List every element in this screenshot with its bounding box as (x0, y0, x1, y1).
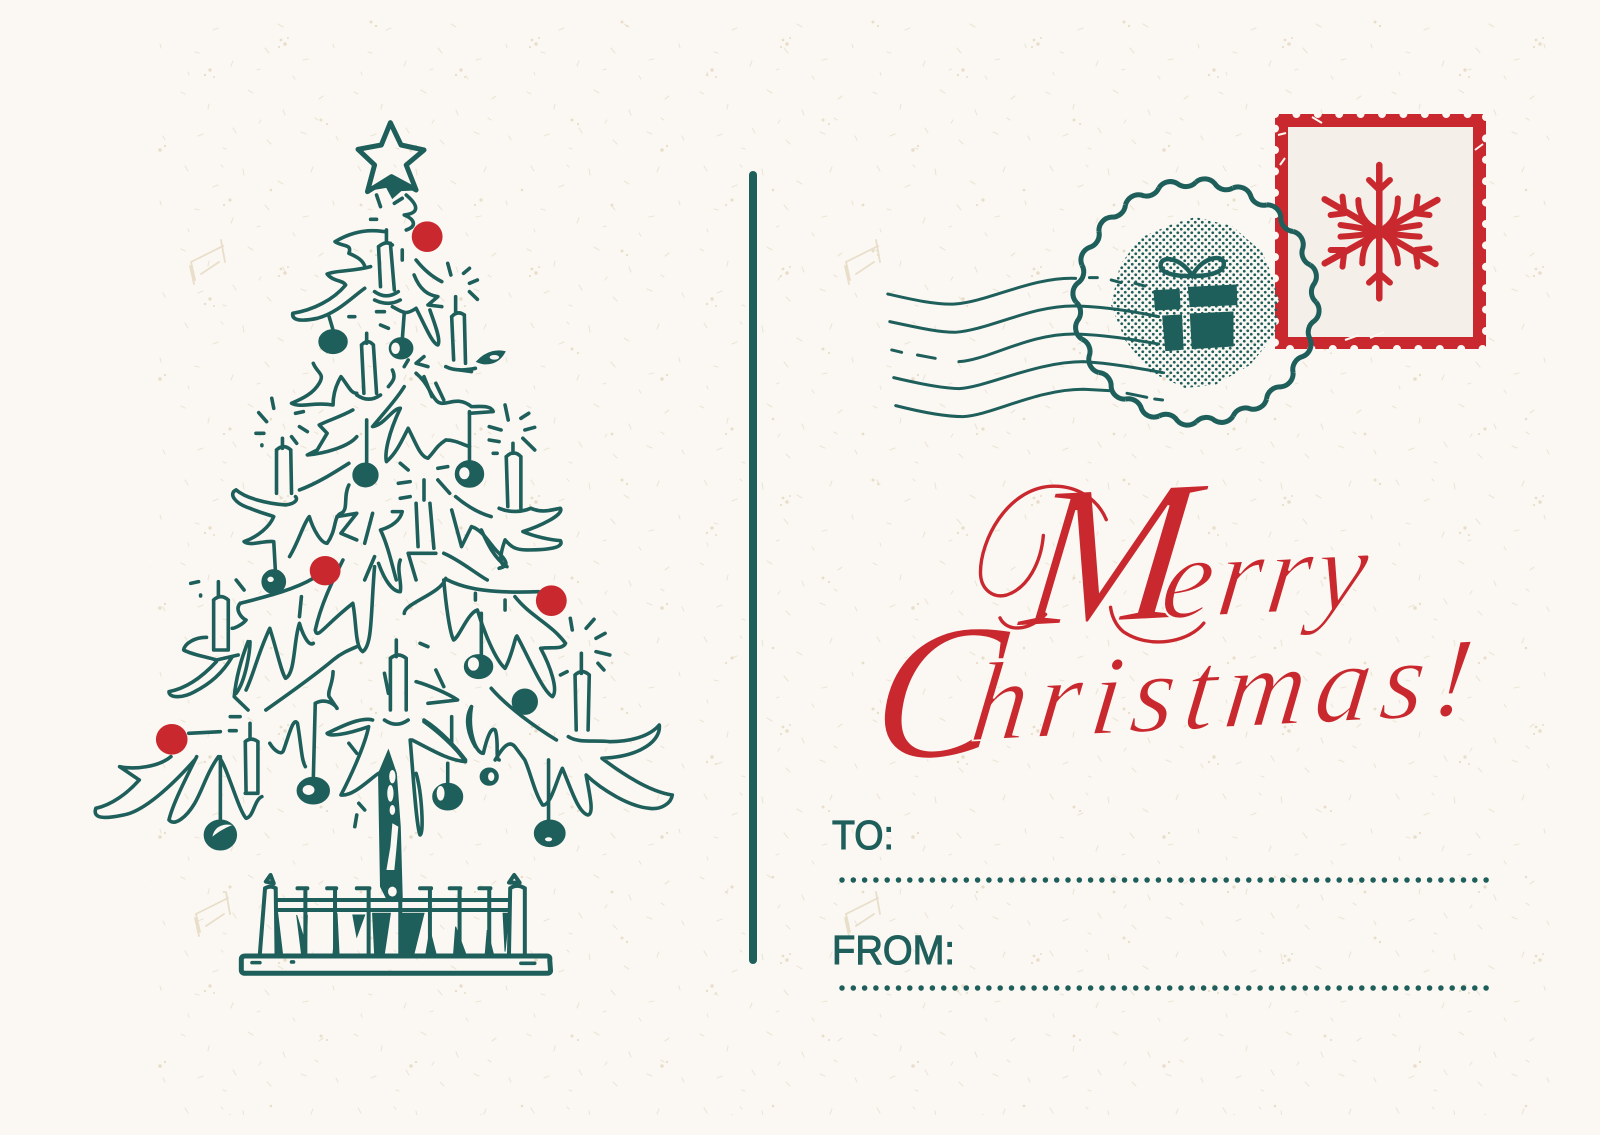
vertical divider (749, 171, 757, 964)
side sparkles and candles (233, 398, 561, 580)
FROM dotted line (842, 985, 1488, 991)
stamp perforations (1275, 114, 1486, 349)
trunk highlights (386, 770, 398, 897)
cancellation wave lines (888, 278, 1163, 417)
fence stand (241, 875, 551, 973)
Merry: Merry (1010, 428, 1385, 670)
christmas tree illustration (95, 123, 672, 973)
lower branches (95, 560, 672, 835)
lower ornaments (204, 570, 565, 850)
greeting: Merry Christmas (863, 428, 1487, 802)
decorative swashes (980, 486, 1204, 642)
hanging ornaments upper (319, 330, 505, 487)
tree lower half (95, 556, 672, 973)
scalloped ring (1067, 173, 1325, 431)
icon: gift (1154, 258, 1237, 351)
top tier branches (292, 195, 493, 463)
postage stamp (1275, 114, 1486, 349)
red bauble top (412, 221, 443, 252)
star (358, 123, 424, 198)
FROM label: FROM: (832, 927, 955, 973)
tree upper half (233, 123, 561, 580)
TO dotted line (842, 877, 1488, 883)
TO label: TO: (832, 812, 894, 858)
trunk (379, 750, 402, 898)
icon: snowflake (1325, 165, 1437, 298)
Christmas!: hristmas! (965, 615, 1480, 766)
red baubles lower (156, 556, 567, 755)
halftone circle (1111, 217, 1279, 388)
Christmas!: C (863, 583, 1018, 802)
postmark (888, 173, 1325, 431)
address fields (832, 812, 1488, 988)
stamp wear (1278, 117, 1483, 340)
